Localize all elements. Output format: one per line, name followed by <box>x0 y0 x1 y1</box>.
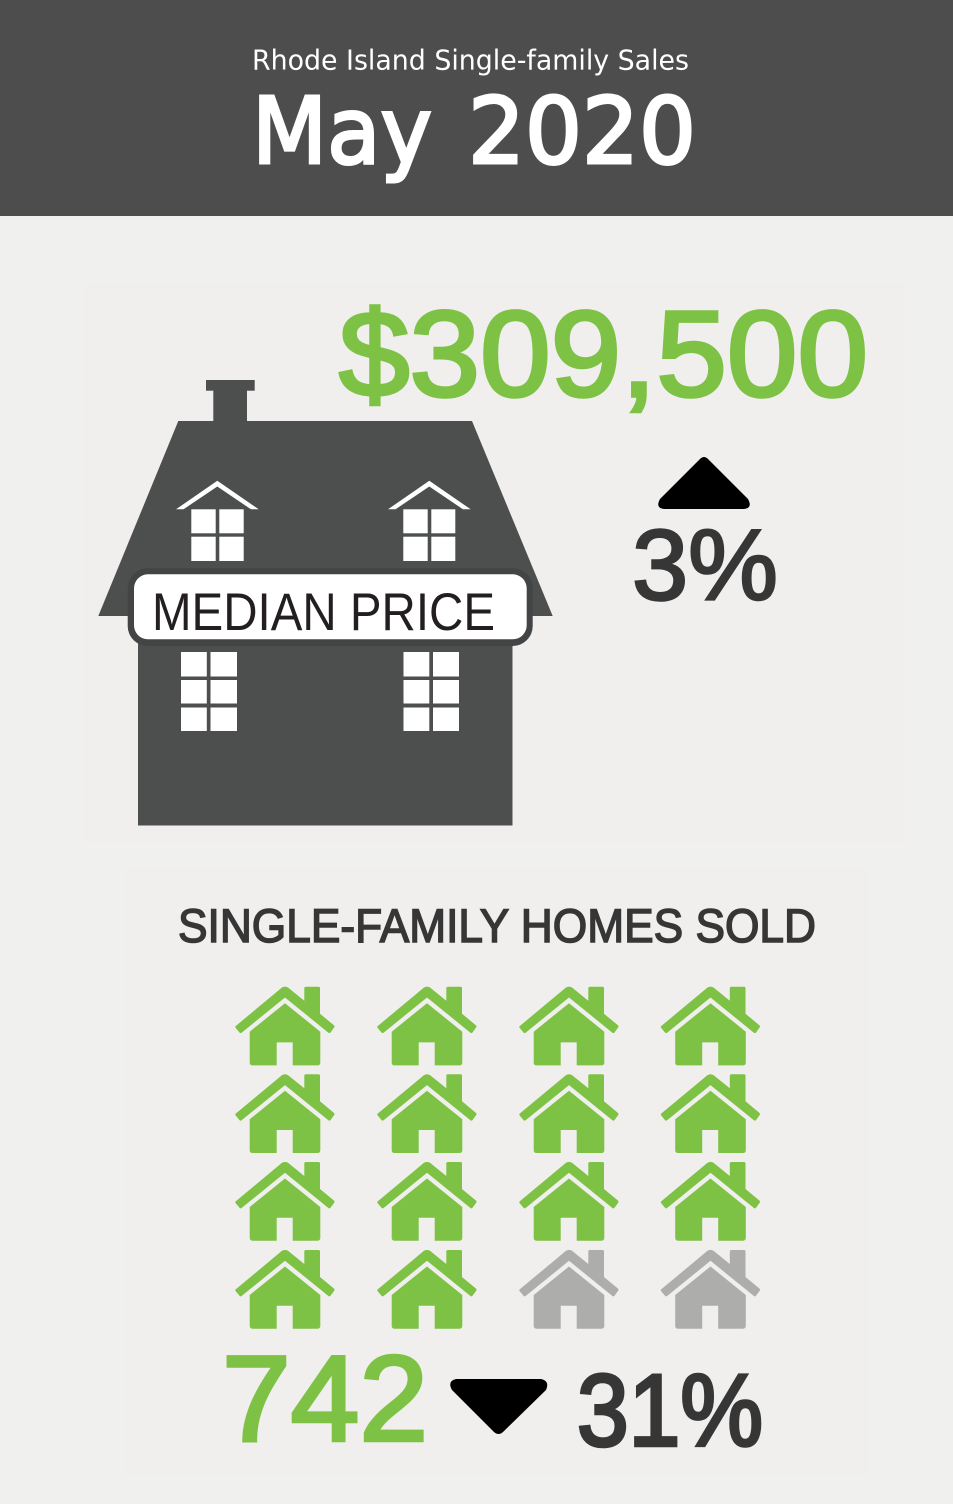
dormer right <box>388 481 471 561</box>
sales change arrow down <box>450 1379 547 1434</box>
homes sold heading: SINGLE-FAMILY HOMES SOLD <box>178 899 816 952</box>
panel: median price <box>83 283 905 843</box>
sales change percent: 31% <box>577 1354 763 1468</box>
illustration: large house <box>98 380 553 826</box>
price change arrow up <box>658 457 750 509</box>
house icon grid <box>235 987 760 1329</box>
subtitle: Rhode Island Single-family Sales <box>252 44 689 76</box>
window lower left <box>181 652 237 731</box>
window lower right <box>404 652 459 731</box>
homes sold value: 742 <box>222 1330 428 1466</box>
median price sign: MEDIAN PRICE <box>152 583 495 642</box>
header band <box>0 0 953 216</box>
dormer left <box>176 481 259 561</box>
price change percent: 3% <box>632 510 778 622</box>
title: 2020 <box>468 78 696 185</box>
median price value: $309,500 <box>339 286 868 422</box>
panel: homes sold <box>125 868 868 1475</box>
title <box>252 78 696 185</box>
title: May <box>252 78 432 185</box>
